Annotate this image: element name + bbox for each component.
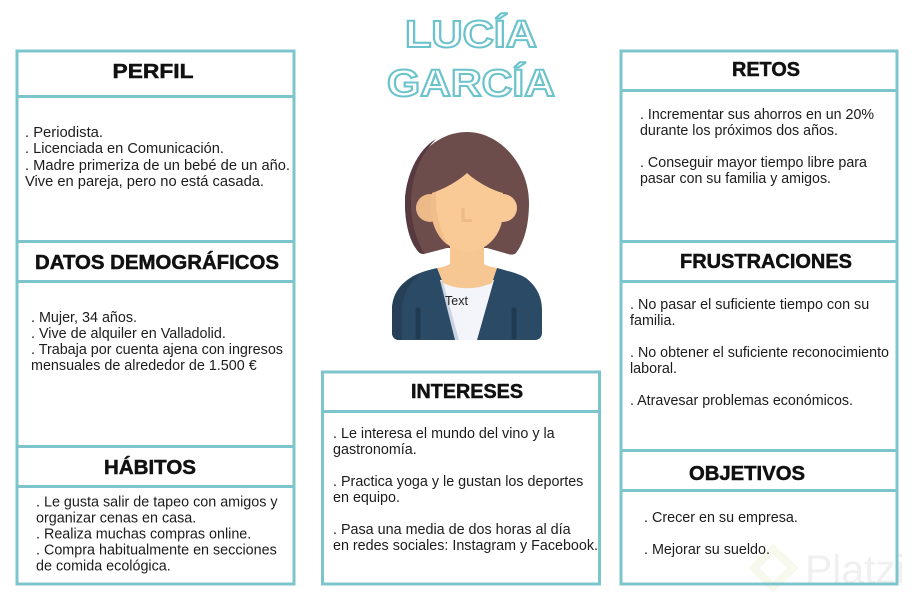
text: objetivos: . Mejorar su sueldo. <box>644 542 770 558</box>
icon: woman avatar <box>392 132 542 340</box>
text: datos demográficos: . Trabaja por cuenta ajena con ingresos <box>31 342 283 358</box>
text: retos: durante los próximos dos años. <box>640 123 838 139</box>
shirt <box>440 280 494 340</box>
panel: intereses <box>322 372 600 584</box>
chest skin <box>437 264 497 288</box>
text: intereses <box>333 426 598 554</box>
text: datos demográficos <box>31 310 283 374</box>
heading: hábitos: HÁBITOS <box>104 456 196 479</box>
text: intereses: . Practica yoga y le gustan los deportes <box>333 474 583 490</box>
face <box>431 173 503 252</box>
nose <box>463 208 472 220</box>
title: LUCÍA <box>405 12 537 56</box>
title <box>387 12 555 105</box>
text: objetivos <box>644 510 798 558</box>
text: frustraciones: . No obtener el suficiente reconocimiento <box>630 345 889 361</box>
text: hábitos: de comida ecológica. <box>36 558 171 574</box>
text: perfil: Vive en pareja, pero no está casada. <box>25 174 264 190</box>
heading: datos demográficos: DATOS DEMOGRÁFICOS <box>35 251 279 274</box>
text: hábitos: . Le gusta salir de tapeo con amigos y <box>36 494 278 510</box>
panel: right column <box>621 51 897 584</box>
text: retos <box>640 107 874 187</box>
neck <box>450 244 484 268</box>
heading: objetivos: OBJETIVOS <box>689 463 805 485</box>
ears <box>416 194 444 222</box>
jacket pleats <box>418 310 514 337</box>
text: intereses: en redes sociales: Instagram y Facebook. <box>333 538 598 554</box>
label: Text: Text <box>445 294 468 308</box>
text: frustraciones: . Atravesar problemas económicos. <box>630 393 853 409</box>
heading: retos: RETOS <box>732 59 800 81</box>
text: intereses: . Le interesa el mundo del vino y la <box>333 426 555 442</box>
text: datos demográficos: . Vive de alquiler en Valladolid. <box>31 326 226 342</box>
text: hábitos: . Compra habitualmente en secciones <box>36 542 277 558</box>
hair <box>405 132 529 255</box>
heading: frustraciones: FRUSTRACIONES <box>680 251 852 273</box>
text: retos: . Incrementar sus ahorros en un 20% <box>640 107 874 123</box>
text: intereses: . Pasa una media de dos horas al día <box>333 522 571 538</box>
watermark: Platzi: Platzi <box>805 548 905 592</box>
watermark: Platzi <box>754 548 905 592</box>
text: datos demográficos: mensuales de alrededor de 1.500 € <box>31 358 257 374</box>
text: perfil <box>25 125 290 190</box>
text: perfil: . Madre primeriza de un bebé de un año. <box>25 158 290 174</box>
text: perfil: . Periodista. <box>25 125 103 141</box>
heading: perfil: PERFIL <box>112 61 194 83</box>
text: hábitos <box>36 494 278 574</box>
text: objetivos: . Crecer en su empresa. <box>644 510 798 526</box>
text: frustraciones: . No pasar el suficiente tiempo con su <box>630 297 869 313</box>
jacket <box>392 268 542 340</box>
text: hábitos: . Realiza muchas compras online. <box>36 526 251 542</box>
text: datos demográficos: . Mujer, 34 años. <box>31 310 137 326</box>
text: frustraciones: laboral. <box>630 361 677 377</box>
text: retos: . Conseguir mayor tiempo libre para <box>640 155 867 171</box>
text: hábitos: organizar cenas en casa. <box>36 510 196 526</box>
text: retos: pasar con su familia y amigos. <box>640 171 831 187</box>
panel: left column <box>17 51 294 584</box>
text: perfil: . Licenciada en Comunicación. <box>25 141 224 157</box>
text: intereses: en equipo. <box>333 490 400 506</box>
heading: intereses: INTERESES <box>411 381 523 403</box>
text: frustraciones <box>630 297 889 409</box>
text: frustraciones: familia. <box>630 313 675 329</box>
title: GARCÍA <box>387 61 555 105</box>
text: intereses: gastronomía. <box>333 442 417 458</box>
